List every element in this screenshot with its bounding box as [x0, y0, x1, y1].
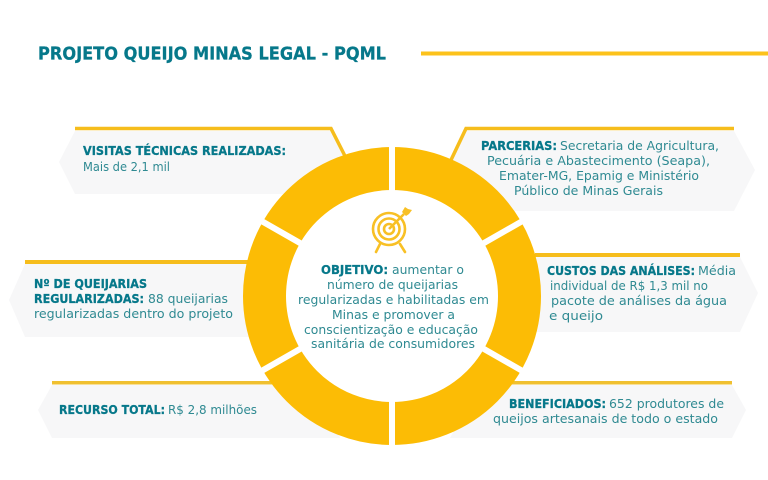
panel: beneficiados: queijos artesanais de todo o estado: [493, 411, 718, 426]
panel: número de queijarias: regularizadas dentro do projeto: [34, 306, 233, 321]
panel: custos das análises: pacote de análises da água: [551, 293, 727, 308]
panel: beneficiados: BENEFICIADOS:: [509, 396, 606, 411]
text block: objetivo: [298, 262, 489, 351]
panel: visitas técnicas: VISITAS TÉCNICAS REALIZADAS:: [83, 143, 286, 158]
text block: objetivo: regularizadas e habilitadas em: [298, 292, 489, 307]
panel: número de queijarias: [9, 260, 260, 337]
panel: custos das análises: [525, 253, 758, 332]
panel: parcerias: Pecuária e Abastecimento (Seapa),: [487, 153, 710, 168]
panel: visitas técnicas: [59, 128, 345, 194]
panel: beneficiados: 652 produtores de: [609, 396, 724, 411]
icon: target with arrow: [373, 207, 412, 252]
panel: parcerias: PARCERIAS:: [481, 138, 557, 153]
panel: número de queijarias: REGULARIZADAS:: [34, 291, 144, 306]
title rule: [421, 52, 768, 56]
panel: recurso total: [38, 381, 340, 438]
text block: objetivo: aumentar o: [392, 262, 464, 277]
ring diagram: [258, 140, 526, 452]
panel: recurso total: R$ 2,8 milhões: [168, 402, 257, 417]
text block: objetivo: conscientização e educação: [304, 322, 478, 337]
text block: objetivo: número de queijarias: [327, 277, 458, 292]
panel: parcerias: Secretaria de Agricultura,: [560, 138, 719, 153]
panel: custos das análises: individual de R$ 1,3 mil no: [550, 278, 708, 293]
panel: visitas técnicas: Mais de 2,1 mil: [83, 159, 170, 174]
panel: número de queijarias: Nº DE QUEIJARIAS: [34, 276, 147, 291]
panel: parcerias: [450, 128, 755, 211]
text block: objetivo: OBJETIVO:: [321, 262, 388, 277]
panel: parcerias: Público de Minas Gerais: [514, 183, 663, 198]
text block: objetivo: Minas e promover a: [332, 307, 455, 322]
panel: parcerias: Emater-MG, Epamig e Ministério: [499, 168, 699, 183]
panel: recurso total: RECURSO TOTAL:: [59, 402, 165, 417]
panel: custos das análises: e queijo: [549, 308, 603, 323]
title: PROJETO QUEIJO MINAS LEGAL - PQML: [38, 44, 386, 64]
panel: custos das análises: CUSTOS DAS ANÁLISES:: [547, 263, 695, 278]
panel: número de queijarias: 88 queijarias: [148, 291, 228, 306]
panel: beneficiados: [450, 381, 746, 438]
text block: objetivo: sanitária de consumidores: [311, 336, 475, 351]
panel: custos das análises: Média: [698, 263, 736, 278]
